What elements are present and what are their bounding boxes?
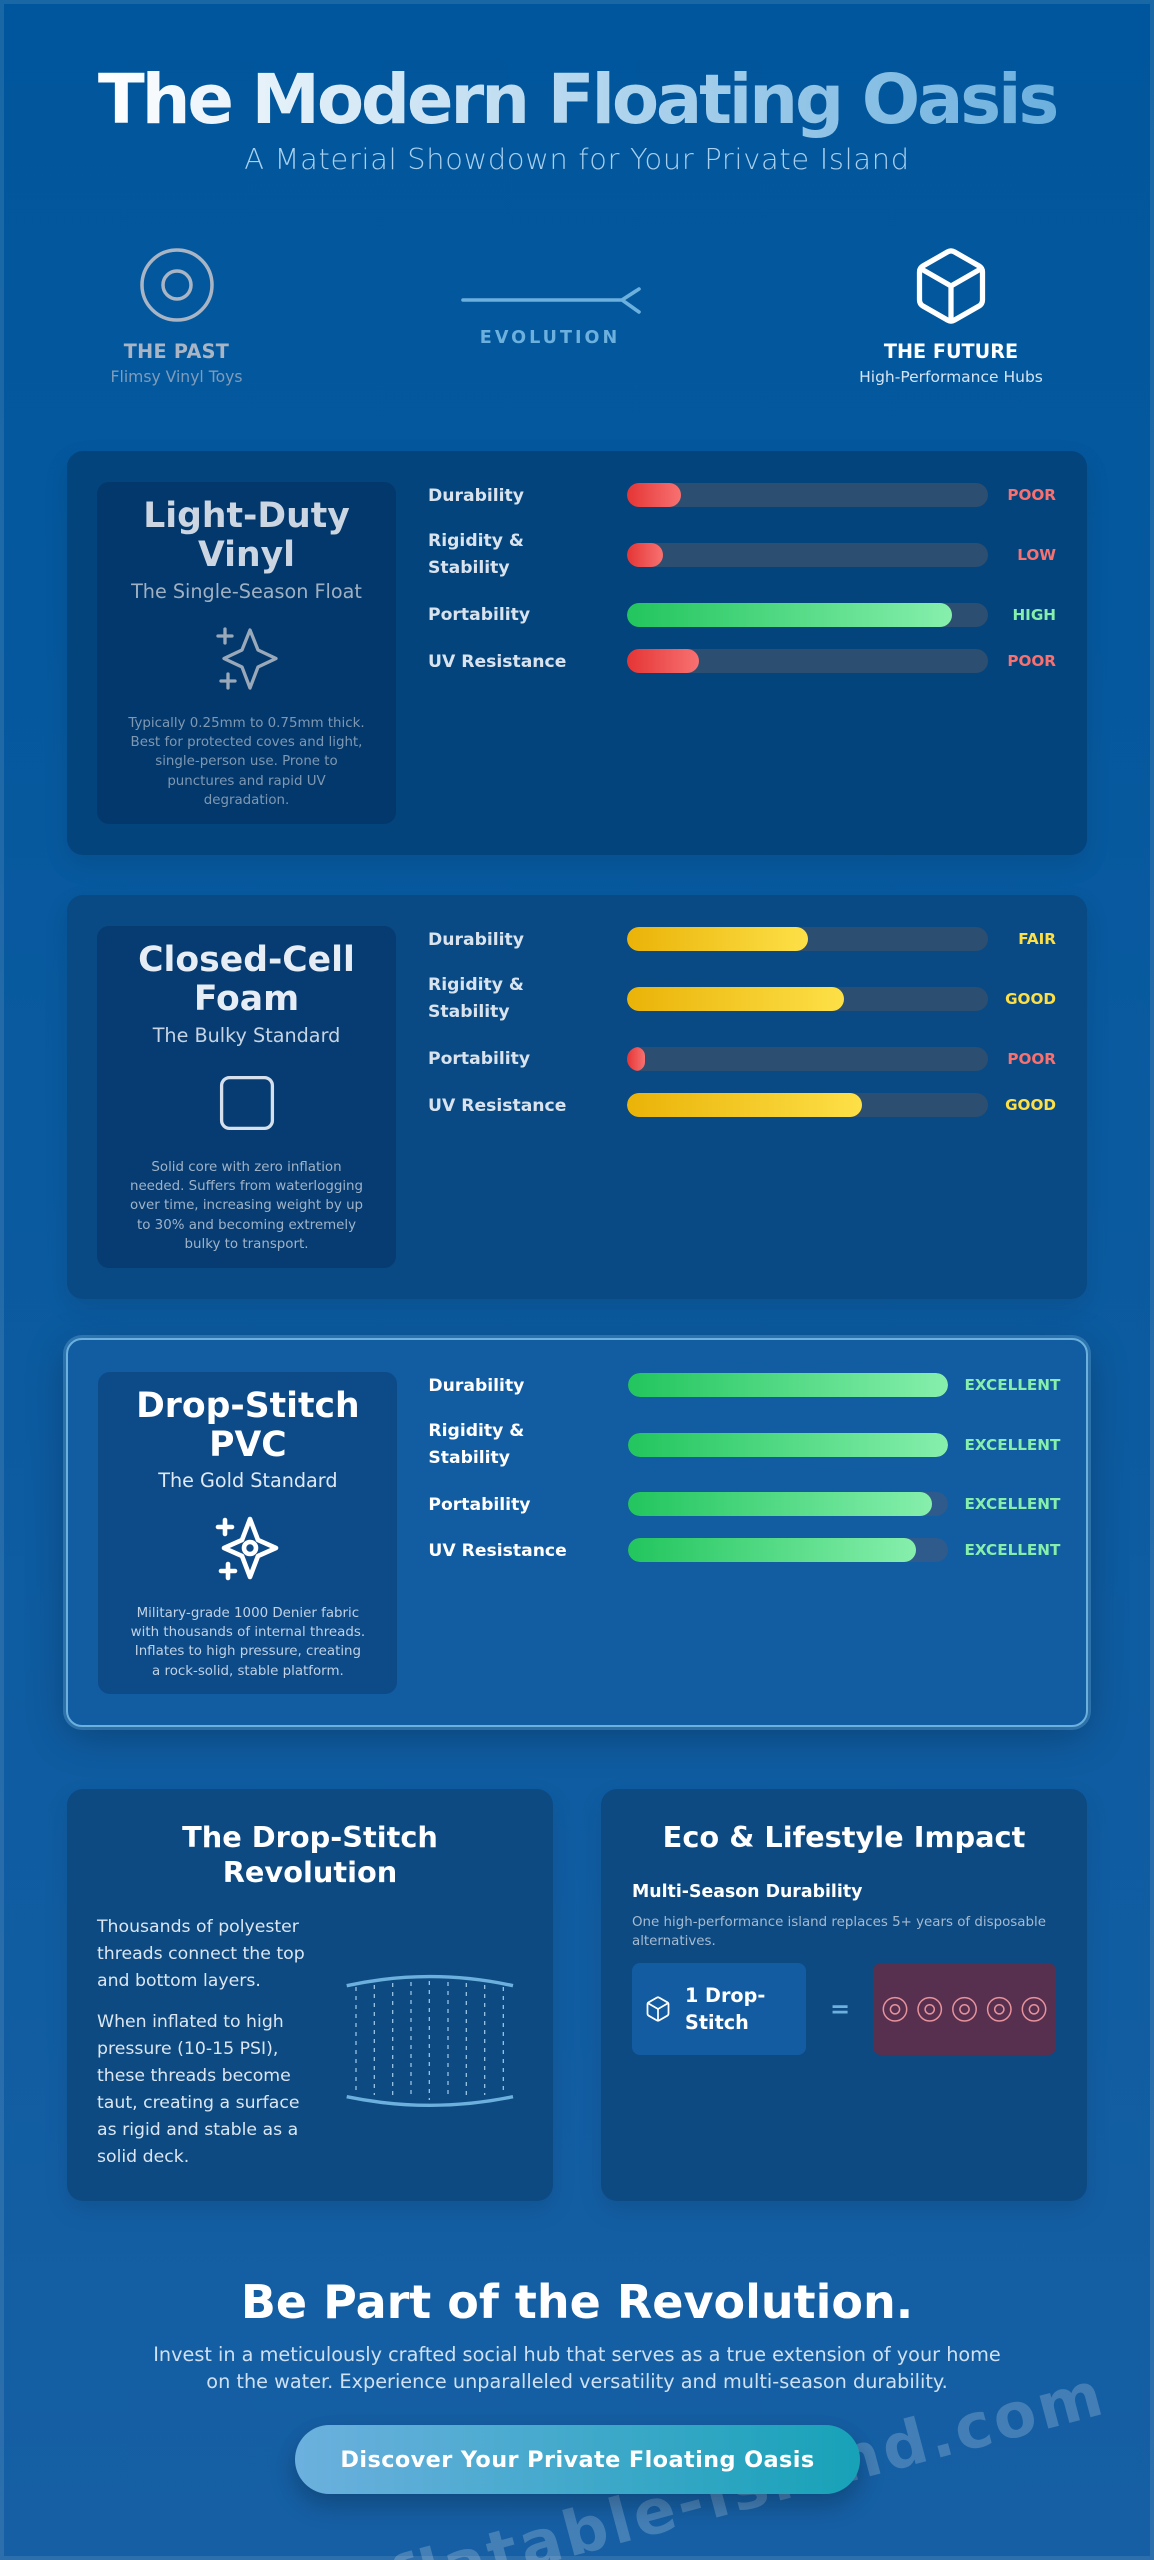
panel: closed-cell foam — [67, 895, 1087, 1299]
icon: cube — [916, 248, 986, 324]
icon: sparkle with core — [216, 1516, 278, 1580]
label — [685, 1984, 765, 2034]
timeline: evolution arrow — [461, 287, 641, 348]
metric: uv resistance: UV Resistance — [428, 1096, 566, 1116]
heading — [182, 1820, 438, 1888]
paragraph: threads — [96, 1916, 305, 1990]
metric: durability: POOR — [1007, 486, 1056, 504]
paragraph: threads: Thousands of polyester — [97, 1916, 299, 1936]
description: bulky to transport. — [184, 1237, 308, 1252]
description — [130, 1160, 363, 1252]
heading: Vinyl — [198, 534, 295, 574]
heading — [138, 940, 355, 1018]
material summary — [98, 1372, 397, 1694]
paragraph: pressure: these threads become — [97, 2066, 291, 2086]
metric: rigidity: Stability — [428, 1448, 510, 1468]
description: single-person use. Prone to — [155, 754, 338, 769]
button — [295, 2425, 860, 2494]
call to action text: Invest in a meticulously crafted social hub that serves as a true extension of your home — [153, 2342, 1001, 2366]
paragraph: pressure: as rigid and stable as a — [97, 2120, 298, 2140]
heading — [143, 496, 350, 574]
description: alternatives. — [632, 1934, 716, 1949]
paragraph: pressure: solid deck. — [97, 2147, 189, 2167]
description: Inflates to high pressure, creating — [135, 1644, 361, 1659]
metric: portability: POOR — [1007, 1050, 1056, 1068]
metric: uv resistance: POOR — [1007, 652, 1056, 670]
metric: uv resistance: UV Resistance — [428, 1540, 567, 1560]
metric: durability — [428, 927, 1056, 951]
arrow — [461, 287, 641, 314]
metric: rigidity: GOOD — [1005, 990, 1056, 1008]
description: Best for protected coves and light, — [131, 735, 362, 750]
label: the past: THE PAST — [124, 340, 229, 363]
panel: eco and lifestyle impact — [601, 1789, 1087, 2201]
metric: portability: EXCELLENT — [965, 1495, 1060, 1513]
paragraph: pressure — [97, 2012, 299, 2167]
metric: portability: Portability — [428, 605, 530, 625]
timeline: the future — [859, 248, 1043, 386]
metric: uv resistance — [428, 1538, 1060, 1562]
description — [128, 716, 365, 808]
description — [632, 1915, 1046, 1949]
metric: rigidity: Stability — [428, 1002, 510, 1022]
subtitle: A Material Showdown for Your Private Island — [244, 142, 910, 176]
equals sign: = — [830, 1995, 850, 2023]
icon: cube — [646, 1996, 670, 2022]
metric: durability: Durability — [428, 486, 524, 506]
label: evolution: EVOLUTION — [480, 328, 620, 348]
metric: portability — [428, 1492, 1060, 1516]
heading: The Drop-Stitch — [182, 1820, 438, 1854]
description: needed. Suffers from waterlogging — [130, 1179, 363, 1194]
label: Stitch — [685, 2011, 749, 2034]
icon: vinyl ring — [140, 248, 214, 322]
heading: Foam — [194, 978, 299, 1018]
description: Military-grade 1000 Denier fabric — [137, 1606, 359, 1621]
panel: the drop-stitch revolution — [67, 1789, 553, 2201]
description: with thousands of internal threads. — [131, 1625, 365, 1640]
heading: Light-Duty — [143, 496, 350, 536]
metric: uv resistance: EXCELLENT — [965, 1541, 1060, 1559]
metric: rigidity: Rigidity & — [428, 531, 524, 551]
equation: one drop-stitch — [632, 1963, 806, 2055]
equation: disposable floats — [873, 1963, 1056, 2055]
paragraph: pressure: taut, creating a surface — [97, 2093, 299, 2113]
description: Solid core with zero inflation — [151, 1160, 342, 1175]
metric: durability: EXCELLENT — [965, 1376, 1060, 1394]
panel: light-duty vinyl — [67, 451, 1087, 855]
label: 1 Drop- — [685, 1984, 765, 2007]
paragraph: threads: and bottom layers. — [97, 1970, 261, 1990]
paragraph: pressure: When inflated to high — [97, 2012, 284, 2032]
description: One high-performance island replaces 5+ years of disposable — [632, 1915, 1046, 1930]
heading — [136, 1386, 360, 1464]
metric: rigidity: Stability — [428, 558, 510, 578]
timeline: the past — [111, 248, 242, 386]
metric: durability: Durability — [428, 930, 524, 950]
caption: flimsy vinyl toys: Flimsy Vinyl Toys — [111, 368, 242, 386]
metric: portability: Portability — [428, 1494, 530, 1514]
metric: durability — [428, 483, 1056, 507]
panel: drop-stitch pvc — [66, 1338, 1088, 1727]
diagram: drop-stitch threads — [346, 1974, 514, 2107]
call to action text: on the water. Experience unparalleled versatility and multi-season durability. — [206, 2370, 948, 2392]
metric: portability — [428, 603, 1056, 627]
description — [131, 1606, 365, 1679]
heading: PVC — [209, 1424, 287, 1464]
metric: rigidity — [428, 531, 1056, 578]
metric: uv resistance: GOOD — [1005, 1096, 1056, 1114]
tagline: The Bulky Standard — [153, 1024, 340, 1047]
metric: rigidity: EXCELLENT — [965, 1436, 1060, 1454]
metric: rigidity: Rigidity & — [428, 975, 524, 995]
metric: rigidity: Rigidity & — [428, 1421, 524, 1441]
button: Discover Your Private Floating Oasis — [340, 2447, 815, 2473]
description: punctures and rapid UV — [167, 774, 326, 789]
description: to 30% and becoming extremely — [137, 1218, 356, 1233]
description: degradation. — [204, 793, 289, 808]
metric: portability: HIGH — [1012, 606, 1056, 624]
tagline: The Single-Season Float — [131, 580, 362, 603]
metric: uv resistance: UV Resistance — [428, 652, 566, 672]
heading: Closed-Cell — [138, 940, 355, 980]
metric: rigidity — [428, 1421, 1060, 1468]
metric: portability: Portability — [428, 1049, 530, 1069]
description: a rock-solid, stable platform. — [152, 1664, 344, 1679]
icons: five vinyl rings — [882, 1996, 1046, 2022]
label: the future: THE FUTURE — [884, 340, 1018, 363]
metric: rigidity: LOW — [1017, 546, 1056, 564]
metric: durability — [428, 1373, 1060, 1397]
paragraph: pressure: pressure (10-15 PSI), — [97, 2039, 278, 2059]
subheading: Multi-Season Durability — [632, 1882, 862, 1902]
tagline: The Gold Standard — [158, 1469, 338, 1492]
heading: Revolution — [223, 1854, 397, 1888]
material summary — [97, 482, 396, 824]
icon: foam block — [220, 1076, 274, 1130]
heading: Drop-Stitch — [136, 1386, 360, 1426]
heading: Eco & Lifestyle Impact — [663, 1820, 1025, 1854]
metric: uv resistance — [428, 1093, 1056, 1117]
metric: uv resistance — [428, 649, 1056, 673]
title: The Modern Floating Oasis — [98, 60, 1056, 140]
metric: durability: Durability — [428, 1376, 524, 1396]
material summary — [97, 926, 396, 1268]
call to action text — [153, 2342, 1001, 2392]
metric: portability — [428, 1047, 1056, 1071]
metric: durability: FAIR — [1018, 930, 1056, 948]
metric: rigidity — [428, 975, 1056, 1022]
icon: sparkle — [216, 627, 278, 690]
description: over time, increasing weight by up — [130, 1198, 363, 1213]
description: Typically 0.25mm to 0.75mm thick. — [128, 716, 365, 731]
call to action heading: Be Part of the Revolution. — [241, 2275, 913, 2329]
caption: high-performance hubs: High-Performance Hubs — [859, 368, 1043, 386]
paragraph: threads: threads connect the top — [97, 1944, 305, 1964]
